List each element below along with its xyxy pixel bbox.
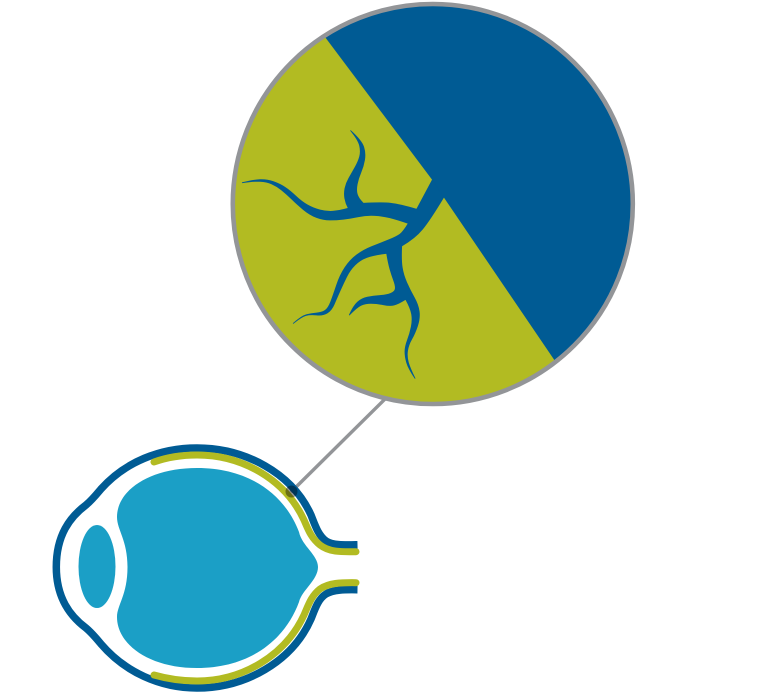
circle outline (233, 4, 633, 404)
connector line from eye to magnified circle (291, 398, 386, 492)
outer blue wall of the eye (56, 448, 358, 688)
infographic: eye cross-section with magnified retina (52, 2, 636, 692)
dark marker where the connector meets the retina (286, 486, 298, 498)
vitreous body (117, 468, 318, 668)
eye cross-section (56, 448, 358, 688)
magnified retina circle (230, 2, 636, 406)
green retina area (233, 4, 633, 404)
branching blood vessels (242, 131, 444, 378)
green retina layer, top (154, 455, 356, 552)
lens (78, 525, 116, 608)
green retina layer, bottom (154, 583, 356, 681)
blue region of the retina (326, 6, 630, 360)
